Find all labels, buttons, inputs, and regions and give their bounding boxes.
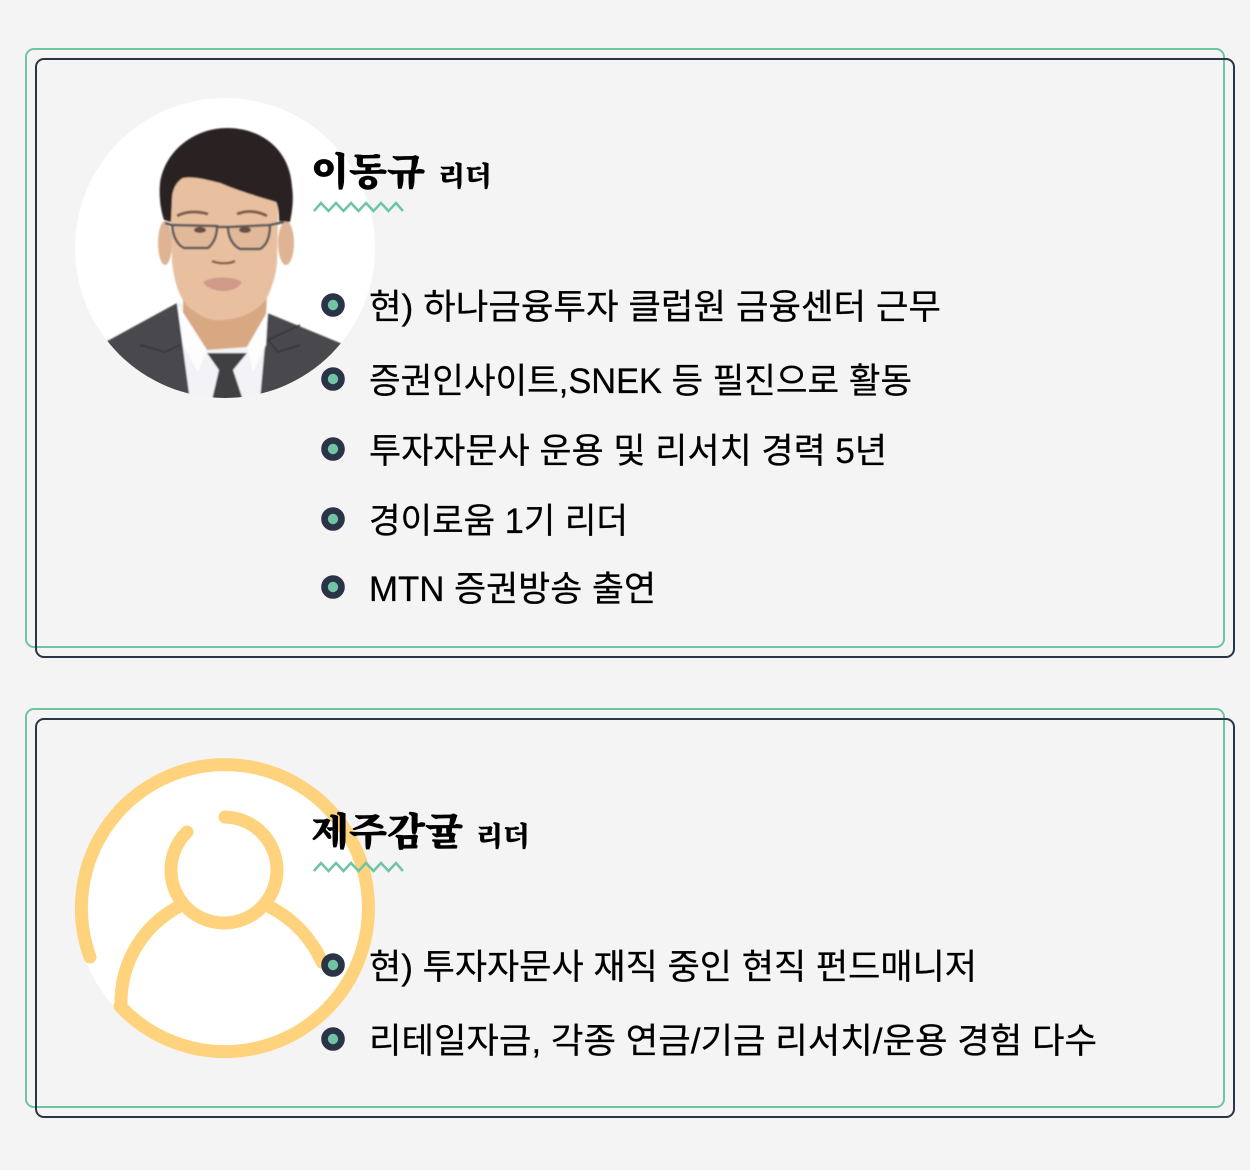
list item 2: 리테일자금, 각종 연금/기금 리서치/운용 경험 다수	[369, 1022, 1097, 1061]
panel: leader profile 2	[26, 709, 1234, 1117]
card frame: dark outline	[36, 59, 1234, 657]
icon: person avatar	[76, 758, 374, 1056]
card frame: green outline	[26, 49, 1224, 647]
heading: leader name	[311, 141, 492, 196]
card frame: green outline	[26, 709, 1224, 1107]
card frame: dark outline	[36, 719, 1234, 1117]
list item 2: 증권인사이트,SNEK 등 필진으로 활동	[369, 362, 912, 401]
portrait photo	[75, 98, 375, 400]
list item 5: MTN 증권방송 출연	[369, 570, 656, 609]
career list	[324, 948, 1097, 1061]
list item 1: 현) 하나금융투자 클럽원 금융센터 근무	[369, 288, 941, 327]
zigzag underline	[314, 203, 403, 211]
heading: leader name	[311, 801, 530, 856]
heading: leader name: 리더	[438, 155, 492, 194]
heading: leader name: 이동규	[311, 141, 425, 196]
list item 1: 현) 투자자문사 재직 중인 현직 펀드매니저	[369, 948, 977, 987]
list item 4: 경이로움 1기 리더	[369, 502, 628, 541]
list item 3: 투자자문사 운용 및 리서치 경력 5년	[369, 432, 887, 471]
panel: leader profile 1	[26, 49, 1234, 657]
heading: leader name: 리더	[476, 815, 530, 854]
career list	[324, 288, 941, 609]
heading: leader name: 제주감귤	[311, 801, 463, 856]
zigzag underline	[314, 863, 403, 871]
